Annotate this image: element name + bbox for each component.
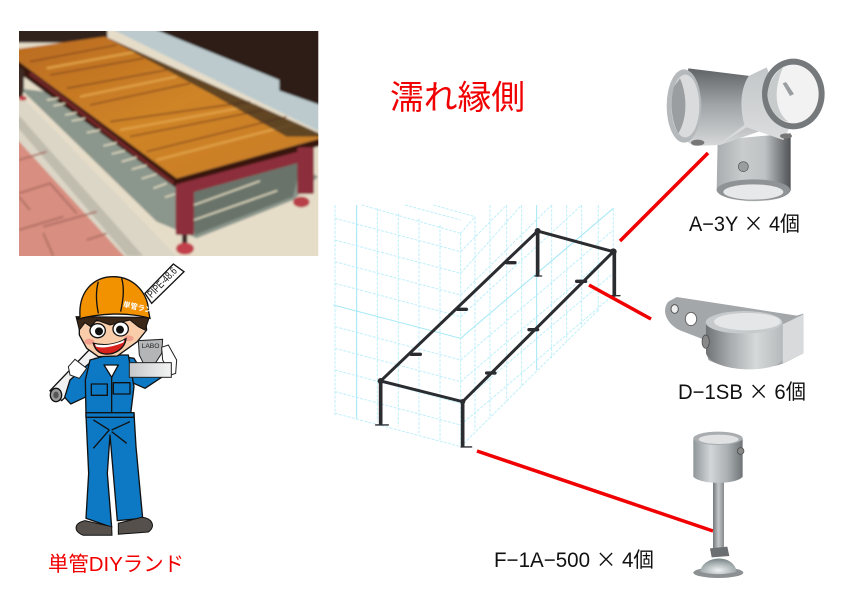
frame diagram: pale blue grid xyxy=(335,205,613,447)
photo: wall and door xyxy=(19,31,318,132)
photo: metal rods beneath deck xyxy=(47,98,277,220)
photo: gravel under the deck xyxy=(20,88,318,238)
caption: mascot brand: 単管DIYランド xyxy=(48,553,184,576)
mascot: worker with pipe and fitting xyxy=(50,264,184,535)
fitting: D-1SB saddle band xyxy=(665,297,803,369)
fitting: A-3Y three-way elbow xyxy=(667,59,825,201)
frame diagram: pipe frame xyxy=(376,228,620,447)
label: F-1A-500: F−1A−500 × 4個 xyxy=(494,544,654,574)
frame diagram: isometric grid and pipe frame xyxy=(333,205,620,447)
title: 濡れ縁側 xyxy=(390,80,525,117)
mascot: orange helmet: 単管ランド xyxy=(122,300,160,316)
label: D-1SB: D−1SB × 6個 xyxy=(678,376,806,406)
red leader line to A-3Y xyxy=(620,153,708,241)
photo: brick paving xyxy=(19,140,126,256)
mascot: tee fitting held in hand xyxy=(68,339,177,378)
red leader line to F-1A-500 xyxy=(477,451,713,531)
mascot: orange helmet xyxy=(77,277,160,319)
photo: wooden veranda xyxy=(19,31,318,256)
mascot: head and face xyxy=(76,317,149,357)
mascot: tee fitting held in hand: LABO xyxy=(142,343,159,350)
mascot: white pipe on right shoulder: PIPE-48.6 xyxy=(145,265,180,300)
mascot: white pipe on right shoulder xyxy=(50,264,184,402)
red leader line to D-1SB xyxy=(589,285,651,319)
photo: concrete curb xyxy=(19,102,174,256)
photo: red steel legs and pipes xyxy=(17,65,314,255)
label: A-3Y: A−3Y × 4個 xyxy=(689,208,800,238)
mascot: shoes xyxy=(76,517,152,535)
photo: wooden deck surface xyxy=(10,37,327,188)
fitting: F-1A-500 adjustable foot xyxy=(693,432,744,578)
mascot: blue coverall xyxy=(65,355,162,527)
